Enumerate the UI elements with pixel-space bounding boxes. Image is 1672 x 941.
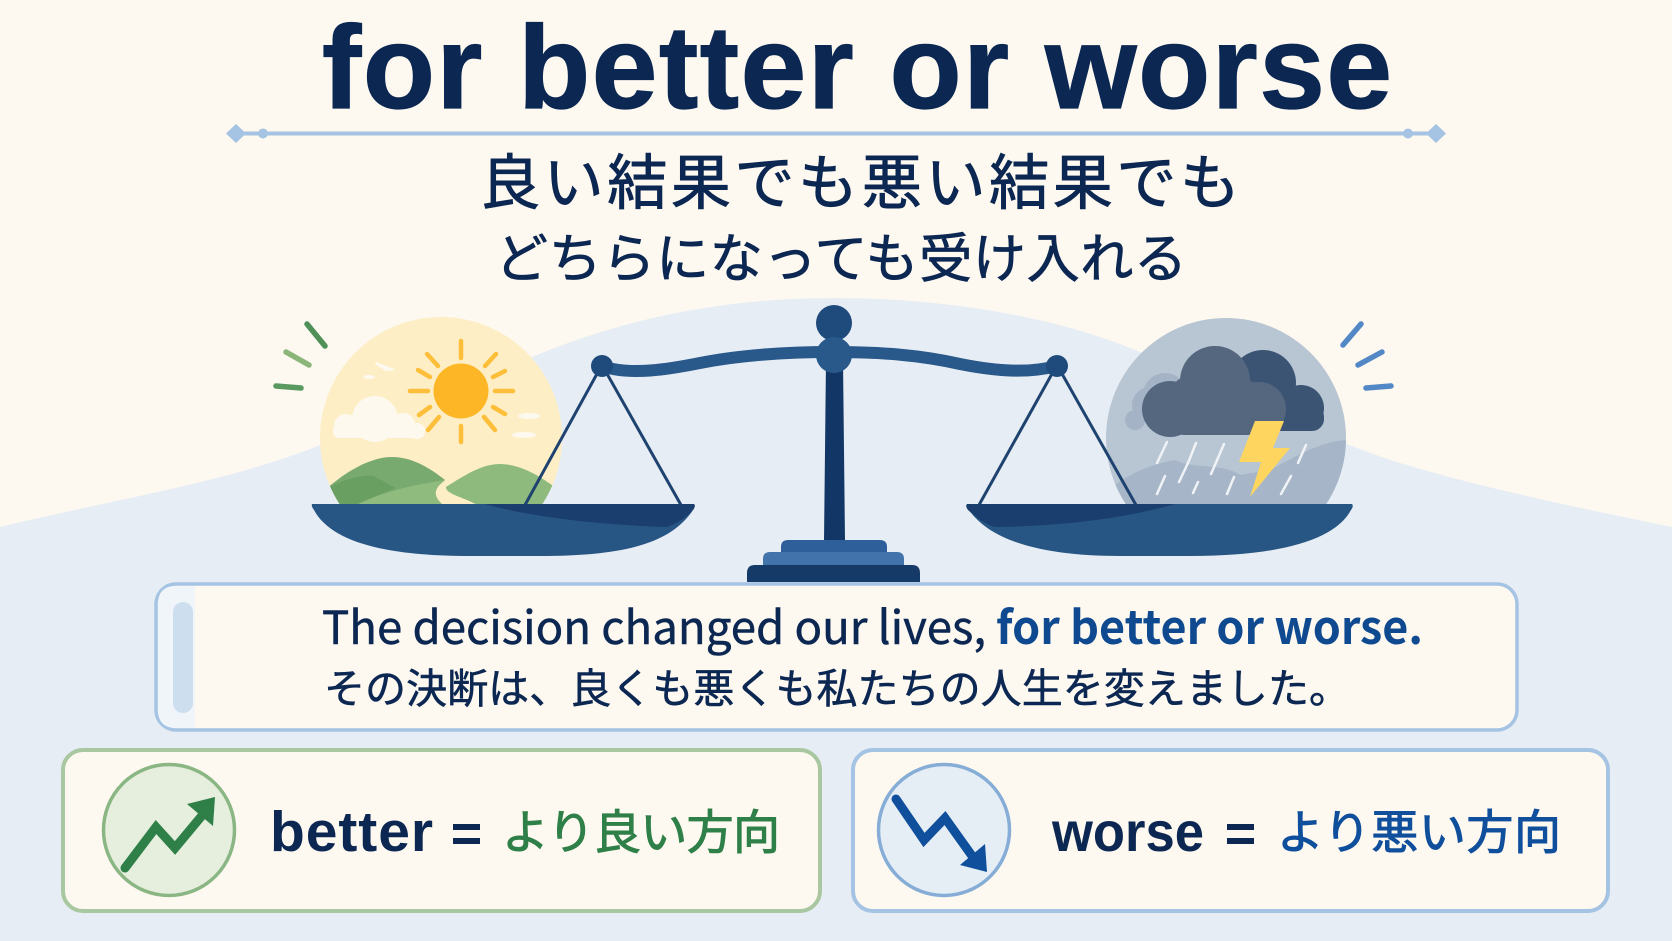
worse meaning: より悪い方向 [1277, 794, 1561, 863]
distant hills [1116, 440, 1346, 504]
illustration: storm [1106, 318, 1346, 504]
icon: dark storm cloud [1142, 346, 1324, 437]
scale knobs [591, 305, 1068, 377]
better label: better [270, 800, 433, 864]
balance scale [312, 305, 1353, 582]
panel: better [63, 750, 820, 911]
icon: up arrow [104, 764, 234, 896]
illustration: sunny landscape [320, 317, 562, 504]
scale beam [602, 352, 1057, 371]
sparkle lines: left [276, 324, 325, 388]
scale pillar [824, 360, 845, 541]
icon: lightning bolt [1239, 421, 1290, 497]
background storm clouds [1125, 373, 1180, 430]
rain [1157, 442, 1306, 494]
panel: example sentence [156, 584, 1517, 730]
icon: sun [410, 341, 513, 442]
equals sign [1227, 824, 1254, 844]
right strings [979, 372, 1136, 505]
left pan [312, 504, 695, 556]
example Japanese: その決断は、良くも悪くも私たちの人生を変えました。 [324, 655, 1350, 715]
better meaning: より良い方向 [502, 794, 780, 863]
subtitle line 1: 良い結果でも悪い結果でも [480, 135, 1240, 222]
right pan [966, 504, 1353, 556]
title: for better or worse [322, 2, 1392, 134]
subtitle line 2: どちらになっても受け入れる [495, 217, 1187, 293]
background hill [0, 298, 1672, 941]
panel: worse [853, 750, 1608, 911]
green hills [330, 457, 552, 504]
equals sign [453, 824, 480, 844]
example highlight: for better or worse. [996, 592, 1423, 658]
accent bar [173, 602, 193, 713]
left strings [525, 372, 681, 505]
worse label: worse [1051, 800, 1204, 863]
icon: white cloud [333, 396, 425, 442]
icon: down arrow [878, 764, 1010, 896]
sparkle lines: right [1343, 324, 1391, 388]
title divider [226, 124, 1446, 143]
small clouds [363, 362, 540, 438]
example English: The decision changed our lives, [322, 592, 986, 658]
scale base [747, 540, 920, 582]
